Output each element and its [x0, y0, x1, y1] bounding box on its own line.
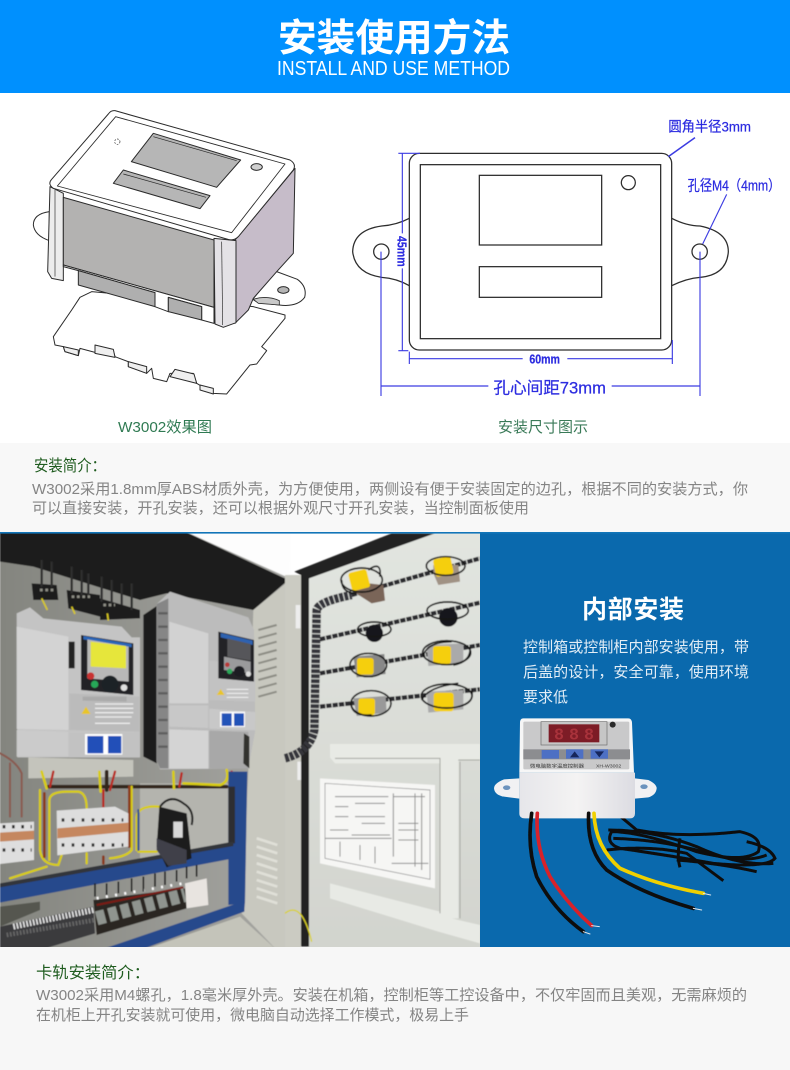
sensor cable loop — [607, 813, 775, 881]
dimension labels: 孔心间距73mm — [493, 378, 606, 397]
button strip — [523, 749, 630, 759]
dimension labels: 60mm — [529, 352, 560, 366]
product: thermostat — [494, 718, 775, 934]
device label: 微电脑数字温度控制器 — [530, 762, 584, 769]
wiring — [0, 753, 232, 878]
schematic sheet — [320, 778, 435, 888]
plate tabs — [63, 345, 213, 394]
front right pillar — [214, 238, 236, 327]
top terminals — [32, 560, 140, 621]
front left pillar — [48, 187, 63, 281]
front panel — [519, 718, 634, 773]
yellow cable — [286, 907, 290, 938]
cable runs — [320, 558, 480, 707]
door panel — [308, 533, 485, 950]
open door — [285, 533, 485, 950]
panel text — [523, 639, 749, 706]
top face — [50, 111, 294, 240]
door frame strip — [285, 575, 301, 950]
panel text: 要求低 — [523, 689, 568, 706]
subtitle: INSTALL AND USE METHOD — [277, 58, 510, 80]
lower window — [113, 170, 210, 209]
top rule — [0, 532, 790, 534]
panel: internal install — [0, 532, 790, 947]
ears — [494, 778, 519, 799]
dimension lines — [381, 138, 727, 396]
out indicator — [610, 722, 616, 728]
dimension labels: 圆角半径3mm — [668, 119, 751, 135]
door hinges — [296, 605, 301, 780]
walls — [0, 530, 290, 950]
W3002 3D drawing — [33, 111, 305, 394]
dimension diagram — [353, 119, 780, 397]
panel text: 后盖的设计，安全可靠，使用环境 — [523, 663, 749, 681]
terminal blocks — [0, 865, 208, 950]
dimension labels: 45mm — [394, 236, 408, 267]
panel: cabinet photo — [0, 530, 485, 950]
rail text — [36, 986, 747, 1024]
panel: rail install intro — [0, 947, 790, 1070]
vertical blue rail — [228, 772, 247, 905]
left inverter — [17, 607, 140, 778]
small marker — [115, 139, 120, 144]
left ear — [33, 212, 49, 241]
cable trunk — [285, 595, 352, 758]
rail text: W3002采用M4螺孔，1.8毫米厚外壳。安装在机箱，控制柜等工控设备中，不仅牢固而且美观，无需麻烦的 — [36, 986, 747, 1004]
front lip — [63, 265, 214, 323]
hole — [251, 164, 262, 170]
rail heading: 卡轨安装简介： — [36, 964, 150, 982]
right side face — [235, 168, 295, 323]
cabinet interior — [0, 530, 290, 950]
rail text: 在机柜上开孔安装就可使用，微电脑自动选择工作模式，极易上手 — [36, 1007, 469, 1024]
door stiffeners — [330, 744, 480, 943]
display — [541, 722, 607, 745]
blue rails — [0, 844, 233, 903]
main window — [131, 133, 241, 187]
breakers — [0, 807, 128, 864]
lower tabs — [78, 271, 155, 307]
device outline — [353, 153, 728, 350]
dimension labels — [394, 119, 780, 397]
header banner — [0, 0, 790, 93]
intro text: 可以直接安装，开孔安装，还可以根据外观尺寸开孔安装，当控制面板使用 — [32, 499, 529, 517]
caption: install dimensions: 安装尺寸图示 — [498, 419, 588, 436]
panel text: 控制箱或控制柜内部安装使用，带 — [523, 639, 749, 656]
body — [519, 773, 635, 818]
vents — [257, 838, 277, 903]
caption: W3002 effect: W3002效果图 — [118, 419, 212, 436]
controllers — [341, 556, 472, 716]
panel heading: 内部安装 — [582, 596, 684, 624]
right ear — [253, 271, 305, 305]
lead wires — [530, 813, 711, 934]
front recessed panel — [63, 197, 214, 307]
door edge — [294, 533, 435, 947]
title: 安装使用方法 — [278, 18, 510, 60]
contactor — [157, 799, 192, 867]
intro text — [32, 481, 748, 517]
intro heading: 安装简介： — [34, 457, 106, 475]
right inverter — [143, 592, 255, 769]
product: thermostat: 888 — [554, 726, 594, 745]
earth wire — [285, 910, 312, 942]
back cover plate — [53, 292, 285, 394]
product: thermostat: XH-W3002 — [596, 763, 622, 768]
intro text: W3002采用1.8mm厚ABS材质外壳，为方便使用，两侧设有便于安装固定的边孔，根据不同的安装方式，你 — [32, 481, 748, 498]
panel: install intro — [0, 443, 790, 532]
